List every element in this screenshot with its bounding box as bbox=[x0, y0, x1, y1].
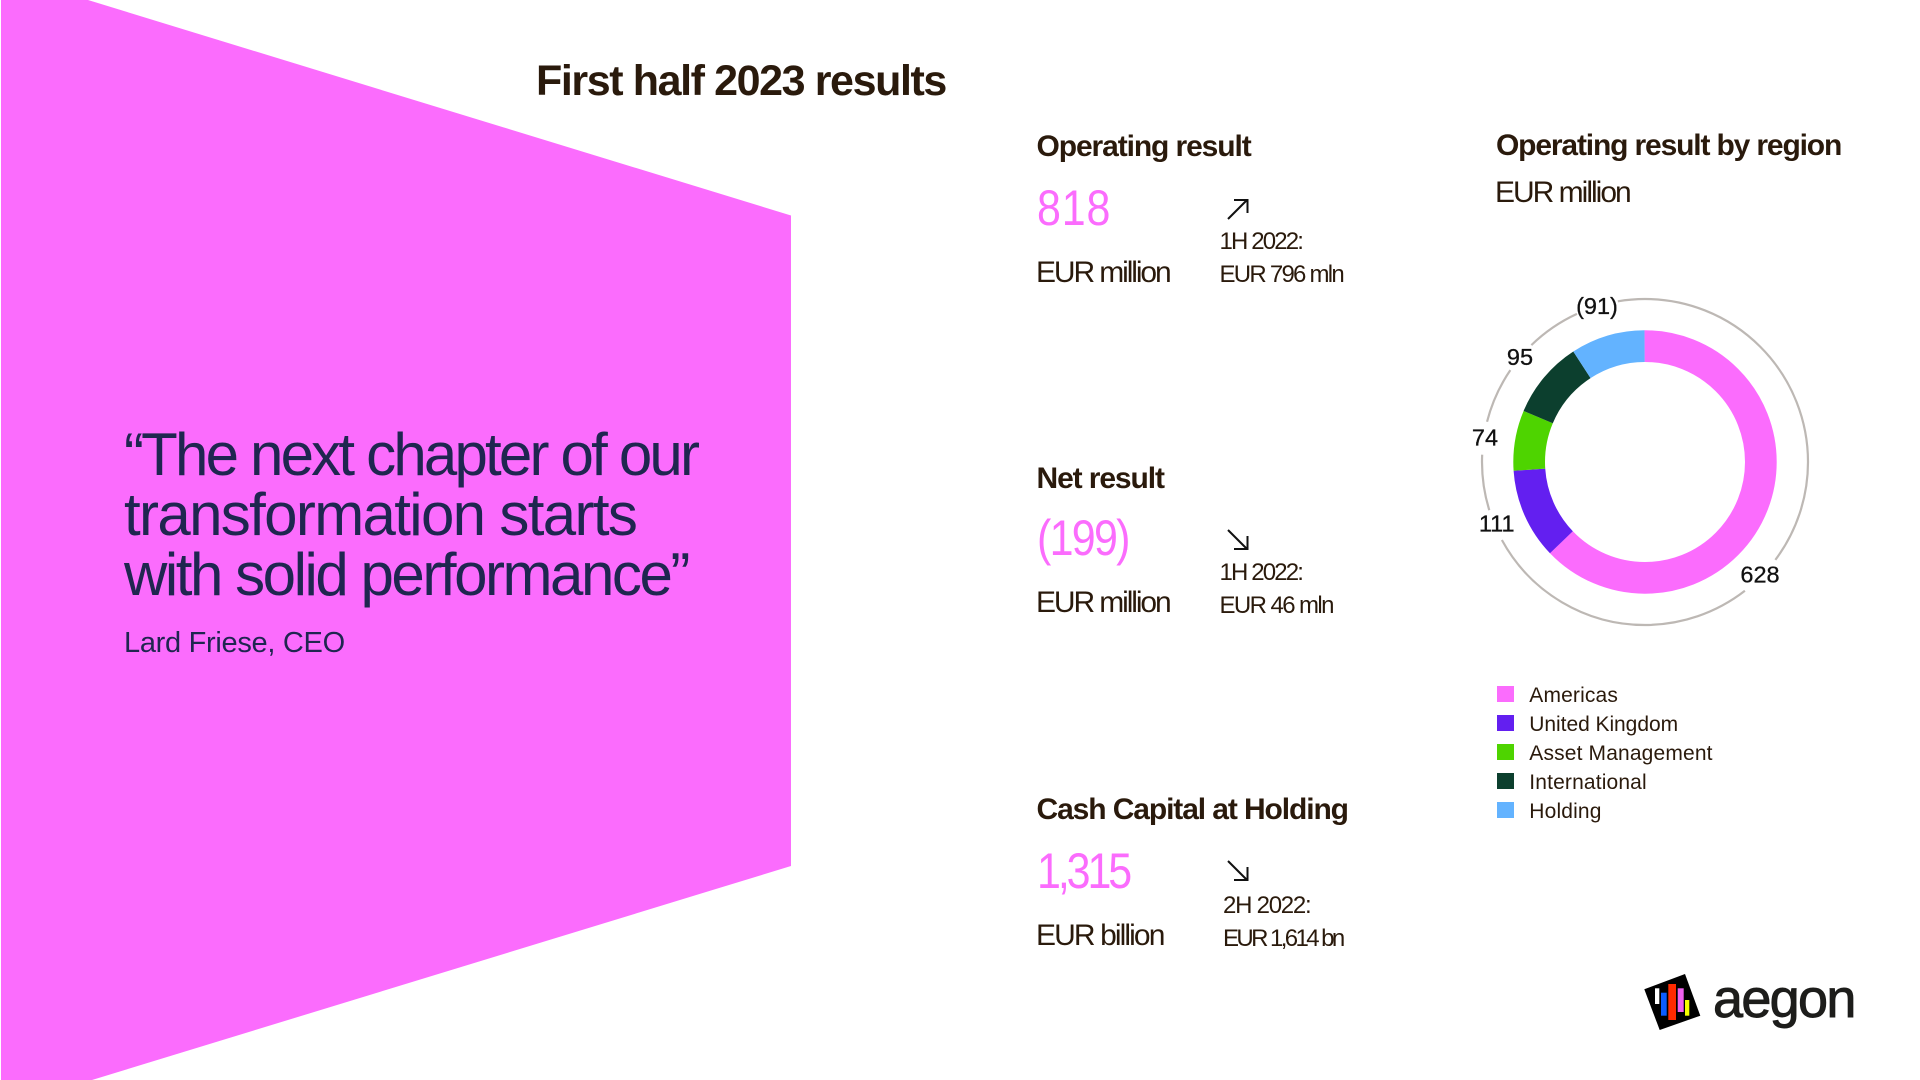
panel: net result bbox=[1036, 462, 1333, 619]
logo wordmark: aegon bbox=[1713, 969, 1855, 1029]
outer ring bbox=[1482, 299, 1808, 625]
comparison text bbox=[1220, 558, 1333, 618]
heading: operating result: Operating result bbox=[1036, 130, 1251, 162]
value: 818: 818 bbox=[1036, 180, 1111, 236]
value labels: 95 bbox=[1507, 344, 1533, 370]
title: First half 2023 results bbox=[536, 57, 946, 105]
comparison text: 2H 2022: bbox=[1223, 892, 1310, 918]
legend bbox=[1497, 684, 1713, 823]
value labels: (91) bbox=[1576, 293, 1618, 319]
heading: operating result by region: Operating result by region bbox=[1496, 129, 1841, 162]
quote text: with solid performance” bbox=[124, 540, 688, 608]
panel: operating result bbox=[1036, 130, 1344, 289]
legend item: Holding bbox=[1497, 800, 1602, 823]
heading: net result: Net result bbox=[1036, 462, 1164, 495]
unit: EUR million bbox=[1036, 586, 1170, 619]
unit: EUR million: EUR million bbox=[1495, 176, 1630, 209]
comparison text: EUR 46 mln bbox=[1220, 592, 1333, 618]
legend item: Holding: Holding bbox=[1529, 800, 1602, 823]
comparison text: EUR 1,614 bn bbox=[1223, 924, 1343, 952]
value: 1,315: 1,315 bbox=[1036, 843, 1129, 899]
value labels: 111 bbox=[1479, 511, 1515, 537]
legend item: United Kingdom: United Kingdom bbox=[1529, 713, 1678, 736]
comparison text: 1H 2022: bbox=[1220, 228, 1302, 255]
value labels: 628 bbox=[1740, 562, 1780, 588]
heading: cash capital at holding: Cash Capital at Holding bbox=[1036, 793, 1348, 826]
comparison text: 1H 2022: bbox=[1220, 558, 1302, 586]
icon: arrow down bbox=[1227, 860, 1248, 881]
value labels bbox=[1472, 293, 1780, 588]
legend item: International: International bbox=[1529, 771, 1647, 794]
value: (199): (199) bbox=[1036, 510, 1128, 566]
unit: EUR million bbox=[1036, 256, 1170, 289]
quote text: transformation starts bbox=[124, 480, 636, 548]
legend item: Americas: Americas bbox=[1529, 684, 1618, 707]
comparison text bbox=[1223, 892, 1344, 952]
icon: arrow down bbox=[1227, 529, 1248, 550]
legend item: Asset Management: Asset Management bbox=[1529, 742, 1713, 765]
icon: arrow up bbox=[1227, 199, 1248, 220]
quote text bbox=[124, 420, 699, 608]
unit: EUR billion bbox=[1036, 919, 1164, 952]
value labels: 74 bbox=[1472, 425, 1498, 451]
panel: cash capital bbox=[1036, 793, 1348, 952]
segments bbox=[1529, 346, 1761, 578]
quote attribution: Lard Friese, CEO bbox=[124, 627, 345, 659]
comparison text: EUR 796 mln bbox=[1220, 261, 1343, 288]
comparison text bbox=[1220, 228, 1344, 288]
quote text: “The next chapter of our bbox=[124, 420, 697, 488]
